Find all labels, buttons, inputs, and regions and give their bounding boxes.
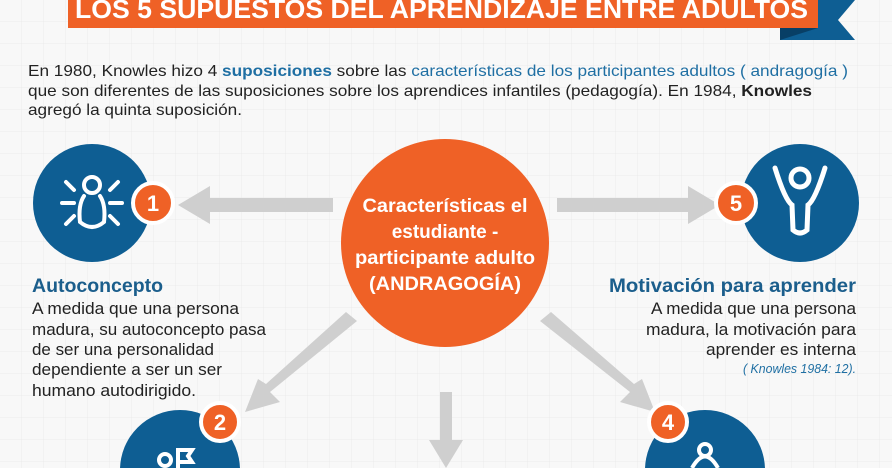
text: autoconcepto: A medida que una persona — [32, 299, 240, 318]
text: autoconcepto: Autoconcepto — [32, 276, 163, 297]
intro text: que son diferentes de las suposiciones sobre los aprendices infantiles (pedagogía). En 1984, Knowles — [28, 83, 812, 100]
text: motivacion — [609, 276, 857, 376]
text: motivacion: A medida que una persona — [651, 299, 857, 318]
icon circle 4 — [645, 403, 765, 468]
center circle: Características el — [362, 196, 528, 217]
intro text: agregó la quinta suposición. — [28, 102, 242, 119]
text: motivacion: aprender es interna — [706, 340, 857, 359]
icon circle 4: 4 — [662, 410, 675, 435]
text: autoconcepto: madura, su autoconcepto pasa — [32, 320, 267, 339]
intro text — [28, 63, 848, 119]
icon circle 2: 2 — [214, 410, 226, 435]
center circle — [341, 139, 549, 347]
icon circle 2 — [120, 403, 240, 468]
icon circle 1: 1 — [147, 191, 159, 216]
text: autoconcepto: de ser una personalidad — [32, 340, 214, 359]
center circle: estudiante - — [392, 222, 498, 243]
icon circle 5 — [716, 144, 859, 262]
text: autoconcepto: dependiente a ser un ser — [32, 360, 222, 379]
text: autoconcepto: humano autodirigido. — [32, 381, 196, 400]
center circle: (ANDRAGOGÍA) — [369, 273, 521, 295]
center circle: participante adulto — [355, 248, 535, 269]
text: motivacion: ( Knowles 1984: 12). — [743, 361, 856, 376]
text: autoconcepto — [32, 276, 267, 400]
icon circle 5: 5 — [730, 191, 742, 216]
intro text: En 1980, Knowles hizo 4 suposiciones sobre las características de los participantes adultos ( andragogía ) — [28, 63, 848, 80]
title banner — [68, 0, 855, 40]
icon circle 1 — [33, 144, 173, 262]
arrows — [178, 186, 720, 468]
text: motivacion: Motivación para aprender — [609, 276, 857, 297]
text: motivacion: madura, la motivación para — [646, 320, 857, 339]
